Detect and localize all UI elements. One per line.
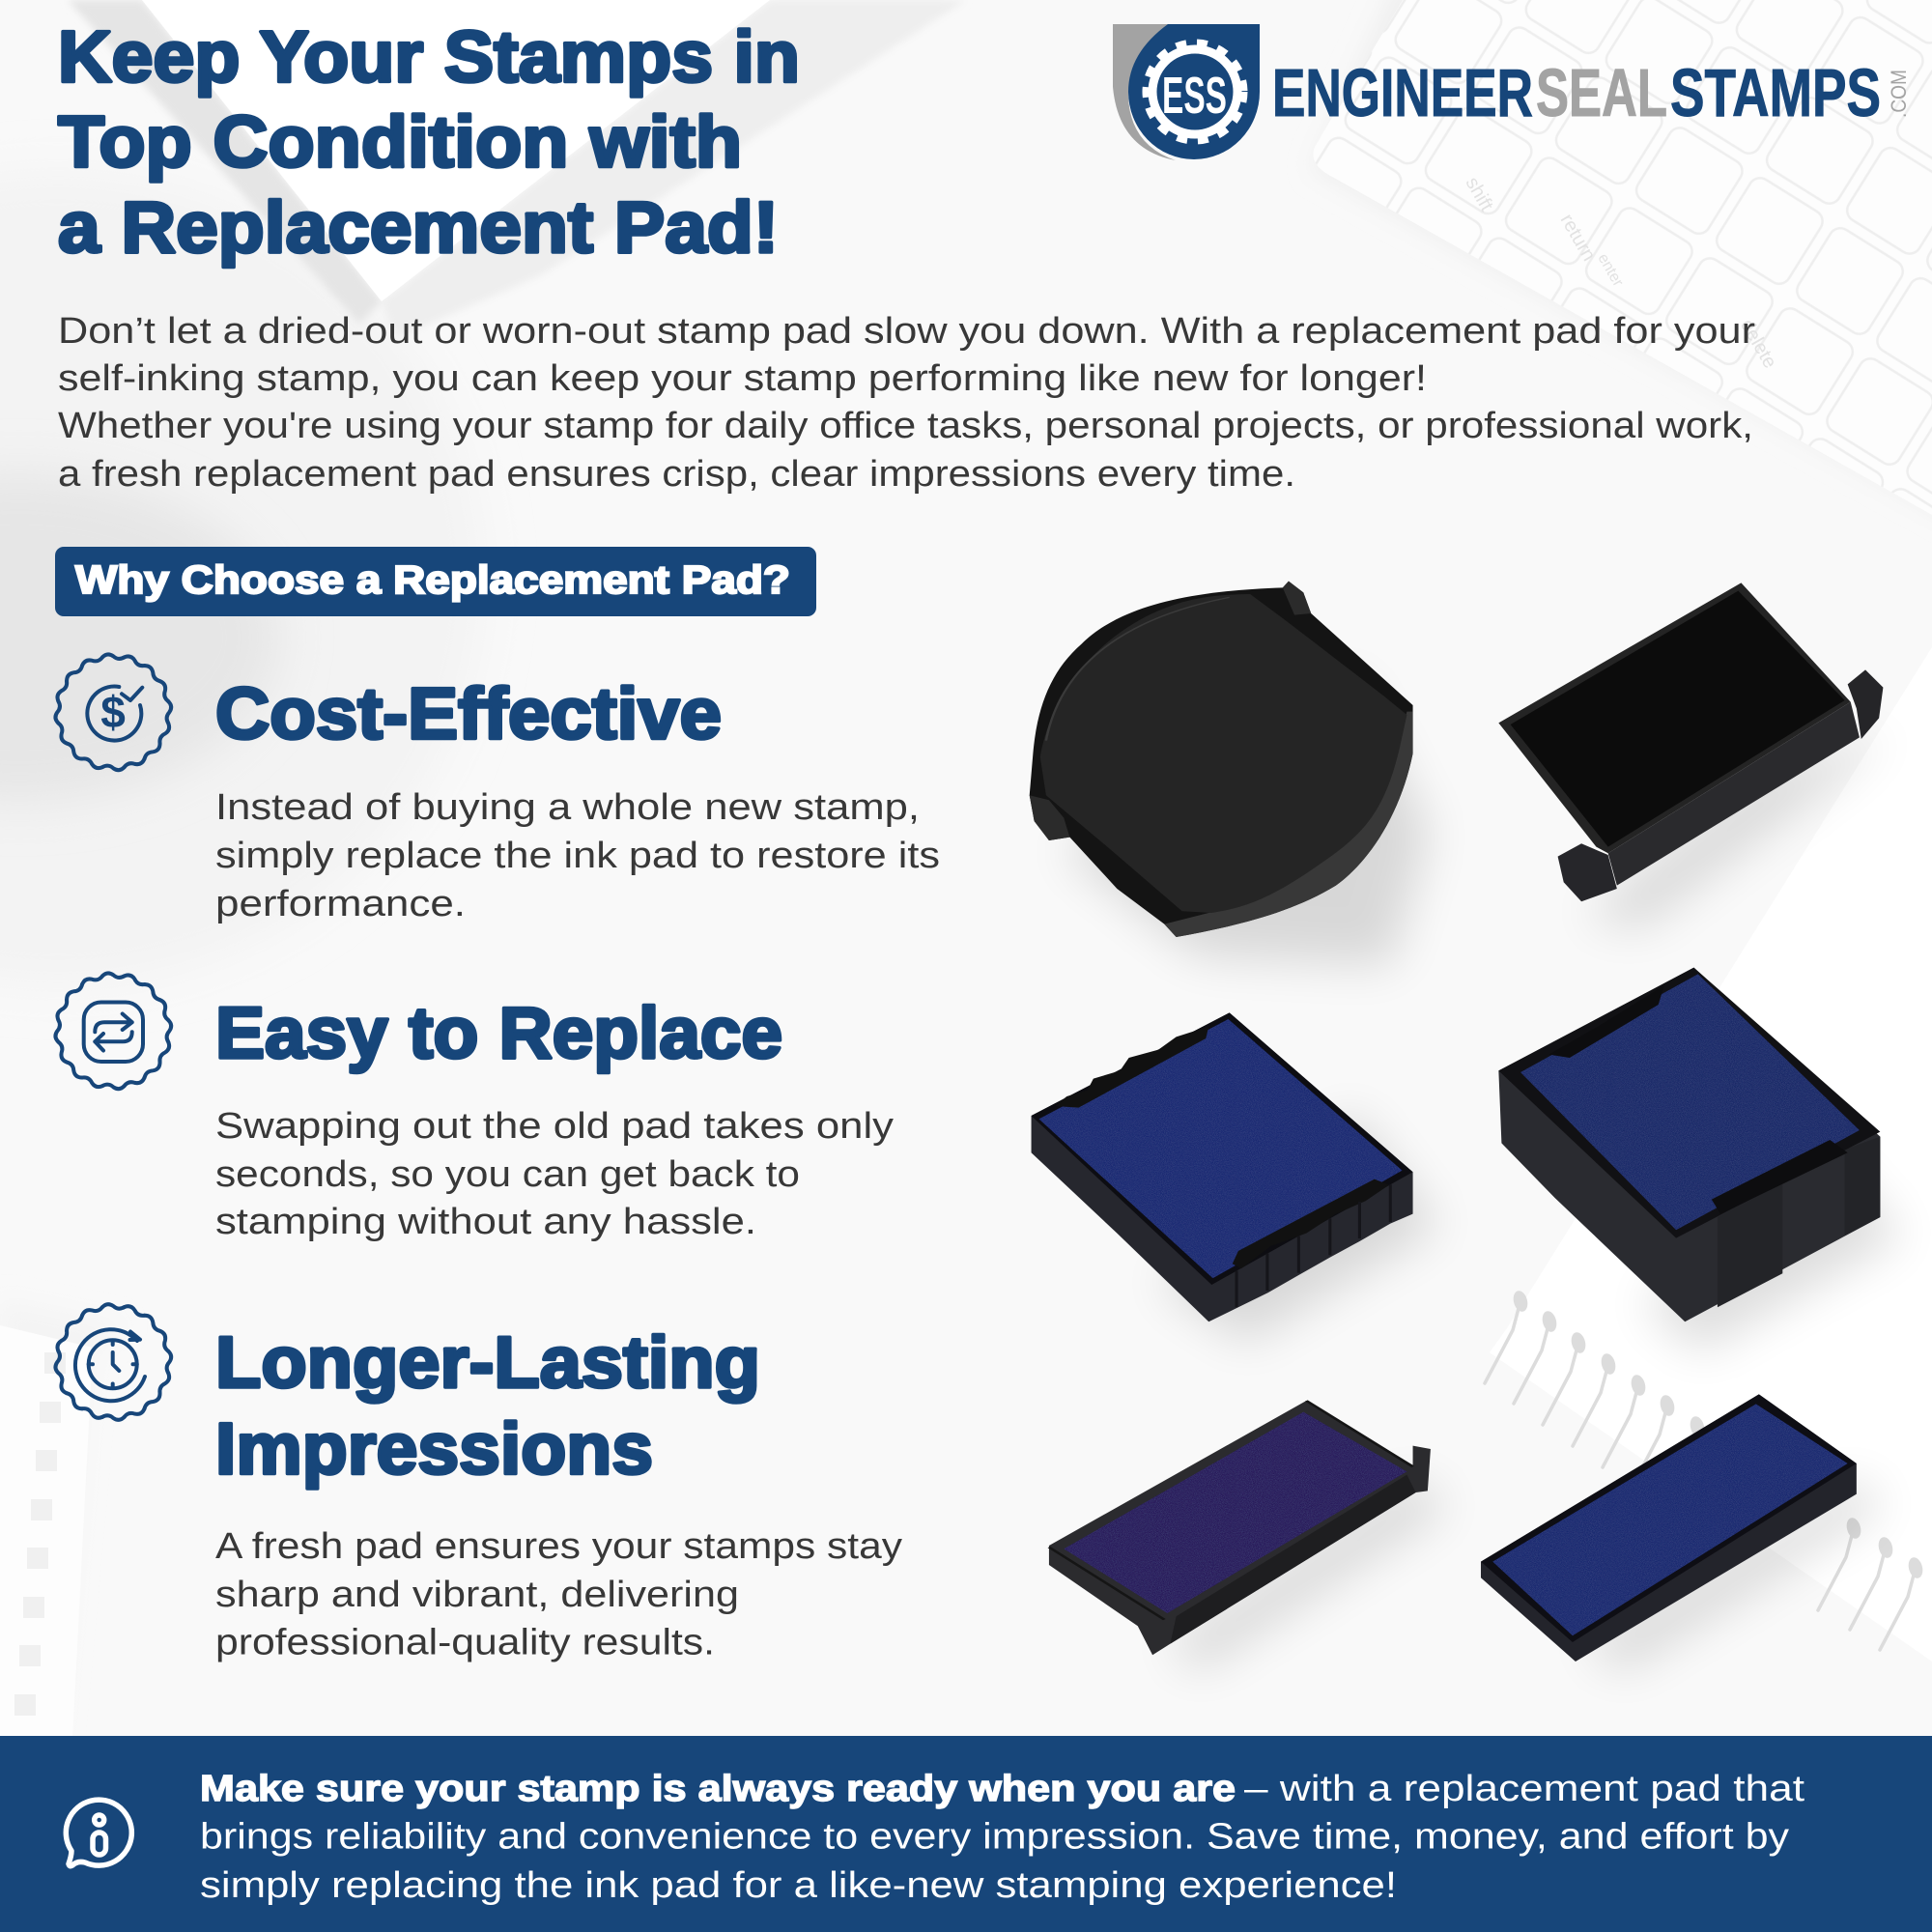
footer text: simply replacing the ink pad for a like-new stamping experience! <box>200 1865 1397 1906</box>
footer text: Make sure your stamp is always ready when you are <box>200 1769 1236 1809</box>
section heading badge <box>55 547 816 616</box>
intro paragraph: Whether you're using your stamp for daily office tasks, personal projects, or professional work, <box>58 406 1753 446</box>
feature: longer-lasting impressions: A fresh pad ensures your stamps stay <box>215 1526 902 1567</box>
title: a Replacement Pad! <box>58 186 779 268</box>
feature: easy to replace: stamping without any hassle. <box>215 1202 756 1242</box>
footer text: brings reliability and convenience to every impression. Save time, money, and effort by <box>200 1816 1789 1857</box>
logo wordmark <box>1272 55 1911 130</box>
intro paragraph: Don’t let a dried-out or worn-out stamp pad slow you down. With a replacement pad for your <box>58 311 1755 352</box>
logo: Engineer Seal Stamps <box>1113 24 1911 160</box>
logo wordmark: .COM <box>1887 70 1911 118</box>
footer text <box>200 1769 1805 1906</box>
intro paragraph <box>58 311 1755 495</box>
feature: easy to replace <box>215 992 894 1242</box>
product: blue rectangular pad <box>1481 1394 1857 1662</box>
feature: easy to replace: Swapping out the old pad takes only <box>215 1106 894 1147</box>
product: purple rectangular pad <box>1049 1401 1431 1655</box>
feature: easy to replace: Easy to Replace <box>215 992 782 1073</box>
icon: cost-effective: $ <box>100 687 126 737</box>
feature: longer-lasting impressions: sharp and vibrant, delivering <box>215 1575 739 1615</box>
section heading badge: Why Choose a Replacement Pad? <box>75 557 790 602</box>
feature: longer-lasting impressions: Impressions <box>215 1408 653 1490</box>
feature: longer-lasting impressions: Longer-Lasting <box>215 1321 760 1403</box>
feature: cost-effective <box>215 672 940 924</box>
icon: info speech bubble <box>66 1800 131 1866</box>
footer banner <box>0 1736 1932 1932</box>
intro paragraph: self-inking stamp, you can keep your stamp performing like new for longer! <box>58 358 1427 399</box>
intro paragraph: a fresh replacement pad ensures crisp, clear impressions every time. <box>58 454 1295 495</box>
icon: easy swap <box>55 973 171 1089</box>
product: square blue pad <box>1032 1012 1413 1321</box>
feature: cost-effective: Instead of buying a whole new stamp, <box>215 787 920 828</box>
feature: longer-lasting impressions <box>215 1321 902 1663</box>
title: Top Condition with <box>58 100 742 182</box>
logo wordmark: ENGINEER <box>1272 55 1533 130</box>
background: desk scene: enter <box>1594 251 1627 290</box>
background: desk scene: shift <box>1461 174 1497 215</box>
footer text: – with a replacement pad that <box>1244 1769 1805 1809</box>
feature: cost-effective: Cost-Effective <box>215 672 722 753</box>
title <box>58 15 800 268</box>
feature: longer-lasting impressions: professional-quality results. <box>215 1623 715 1663</box>
pad shadows <box>1063 676 1903 1671</box>
background: desk scene: return <box>1556 211 1600 265</box>
product: deep square blue pad <box>1498 968 1880 1321</box>
icon: cost-effective <box>55 654 171 770</box>
feature: easy to replace: seconds, so you can get back to <box>215 1154 800 1195</box>
feature: cost-effective: simply replace the ink pad to restore its <box>215 836 940 876</box>
feature: cost-effective: performance. <box>215 884 466 924</box>
product: rectangular black pad <box>1498 582 1883 901</box>
icon: long-lasting clock <box>55 1304 171 1420</box>
title: Keep Your Stamps in <box>58 15 800 97</box>
logo emblem <box>1113 24 1260 160</box>
product: round black pad <box>1030 582 1413 937</box>
background: desk scene: delete <box>1736 316 1780 372</box>
logo wordmark: SEAL <box>1536 55 1667 130</box>
logo emblem: ESS <box>1162 67 1227 125</box>
